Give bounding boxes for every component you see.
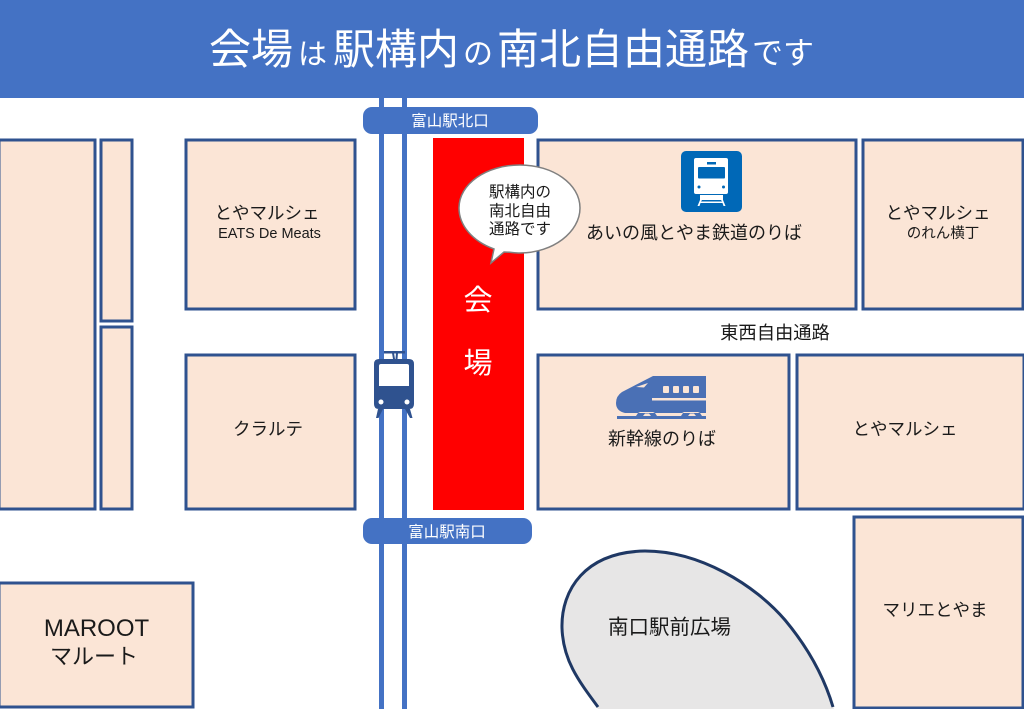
- south exit label: [363, 518, 532, 544]
- north exit label: [363, 107, 538, 134]
- speech bubble: [459, 165, 580, 263]
- building: EATS De Meats: とやマルシェ: [214, 203, 320, 223]
- title banner: 駅構内: [333, 26, 459, 73]
- building: とやマルシェ south: とやマルシェ: [852, 419, 958, 439]
- building: MAROOT マルート: [0, 583, 193, 707]
- venue: red block: 会: [463, 284, 493, 317]
- building: のれん横丁: [863, 140, 1023, 309]
- building: クラルテ: クラルテ: [233, 419, 303, 439]
- north exit label: 富山駅北口: [411, 112, 489, 130]
- venue: red block: [433, 138, 524, 510]
- icon: shinkansen: [616, 376, 706, 419]
- building: MAROOT マルート: マルート: [50, 644, 138, 669]
- building: EATS De Meats: EATS De Meats: [218, 226, 321, 242]
- building: MAROOT マルート: MAROOT: [44, 615, 150, 642]
- speech bubble: 通路です: [489, 220, 551, 238]
- building: のれん横丁: とやマルシェ: [886, 203, 990, 223]
- left tall building: [0, 140, 95, 509]
- title banner: です: [752, 36, 814, 71]
- building: とやマルシェ south: [797, 355, 1024, 509]
- building: 新幹線のりば: [538, 355, 789, 509]
- left narrow building upper: [101, 140, 132, 321]
- left narrow building lower: [101, 327, 132, 509]
- building: あいの風とやま鉄道のりば: [538, 140, 856, 309]
- south plaza: [562, 551, 834, 709]
- label: 東西自由通路: 東西自由通路: [720, 322, 830, 343]
- speech bubble: 南北自由: [489, 202, 551, 220]
- south plaza: 南口駅前広場: [608, 616, 731, 639]
- speech bubble: 駅構内の: [489, 183, 551, 201]
- icon: local train sign: [681, 151, 742, 212]
- building: のれん横丁: のれん横丁: [907, 225, 979, 242]
- building: あいの風とやま鉄道のりば: あいの風とやま鉄道のりば: [586, 223, 802, 243]
- title banner: 会場: [209, 26, 293, 73]
- venue: red block: 場: [463, 347, 493, 380]
- title banner: 南北自由通路: [497, 26, 749, 73]
- title banner: [0, 0, 1024, 98]
- icon: tram: [374, 351, 414, 418]
- railway tracks: [379, 98, 407, 709]
- building: マリエとやま: [854, 517, 1023, 708]
- building: クラルテ: [186, 355, 355, 509]
- title banner: は: [298, 39, 327, 71]
- building: 新幹線のりば: 新幹線のりば: [608, 429, 716, 449]
- south exit label: 富山駅南口: [408, 523, 486, 541]
- building: マリエとやま: マリエとやま: [882, 600, 988, 620]
- building: EATS De Meats: [186, 140, 355, 309]
- title banner: の: [463, 38, 493, 71]
